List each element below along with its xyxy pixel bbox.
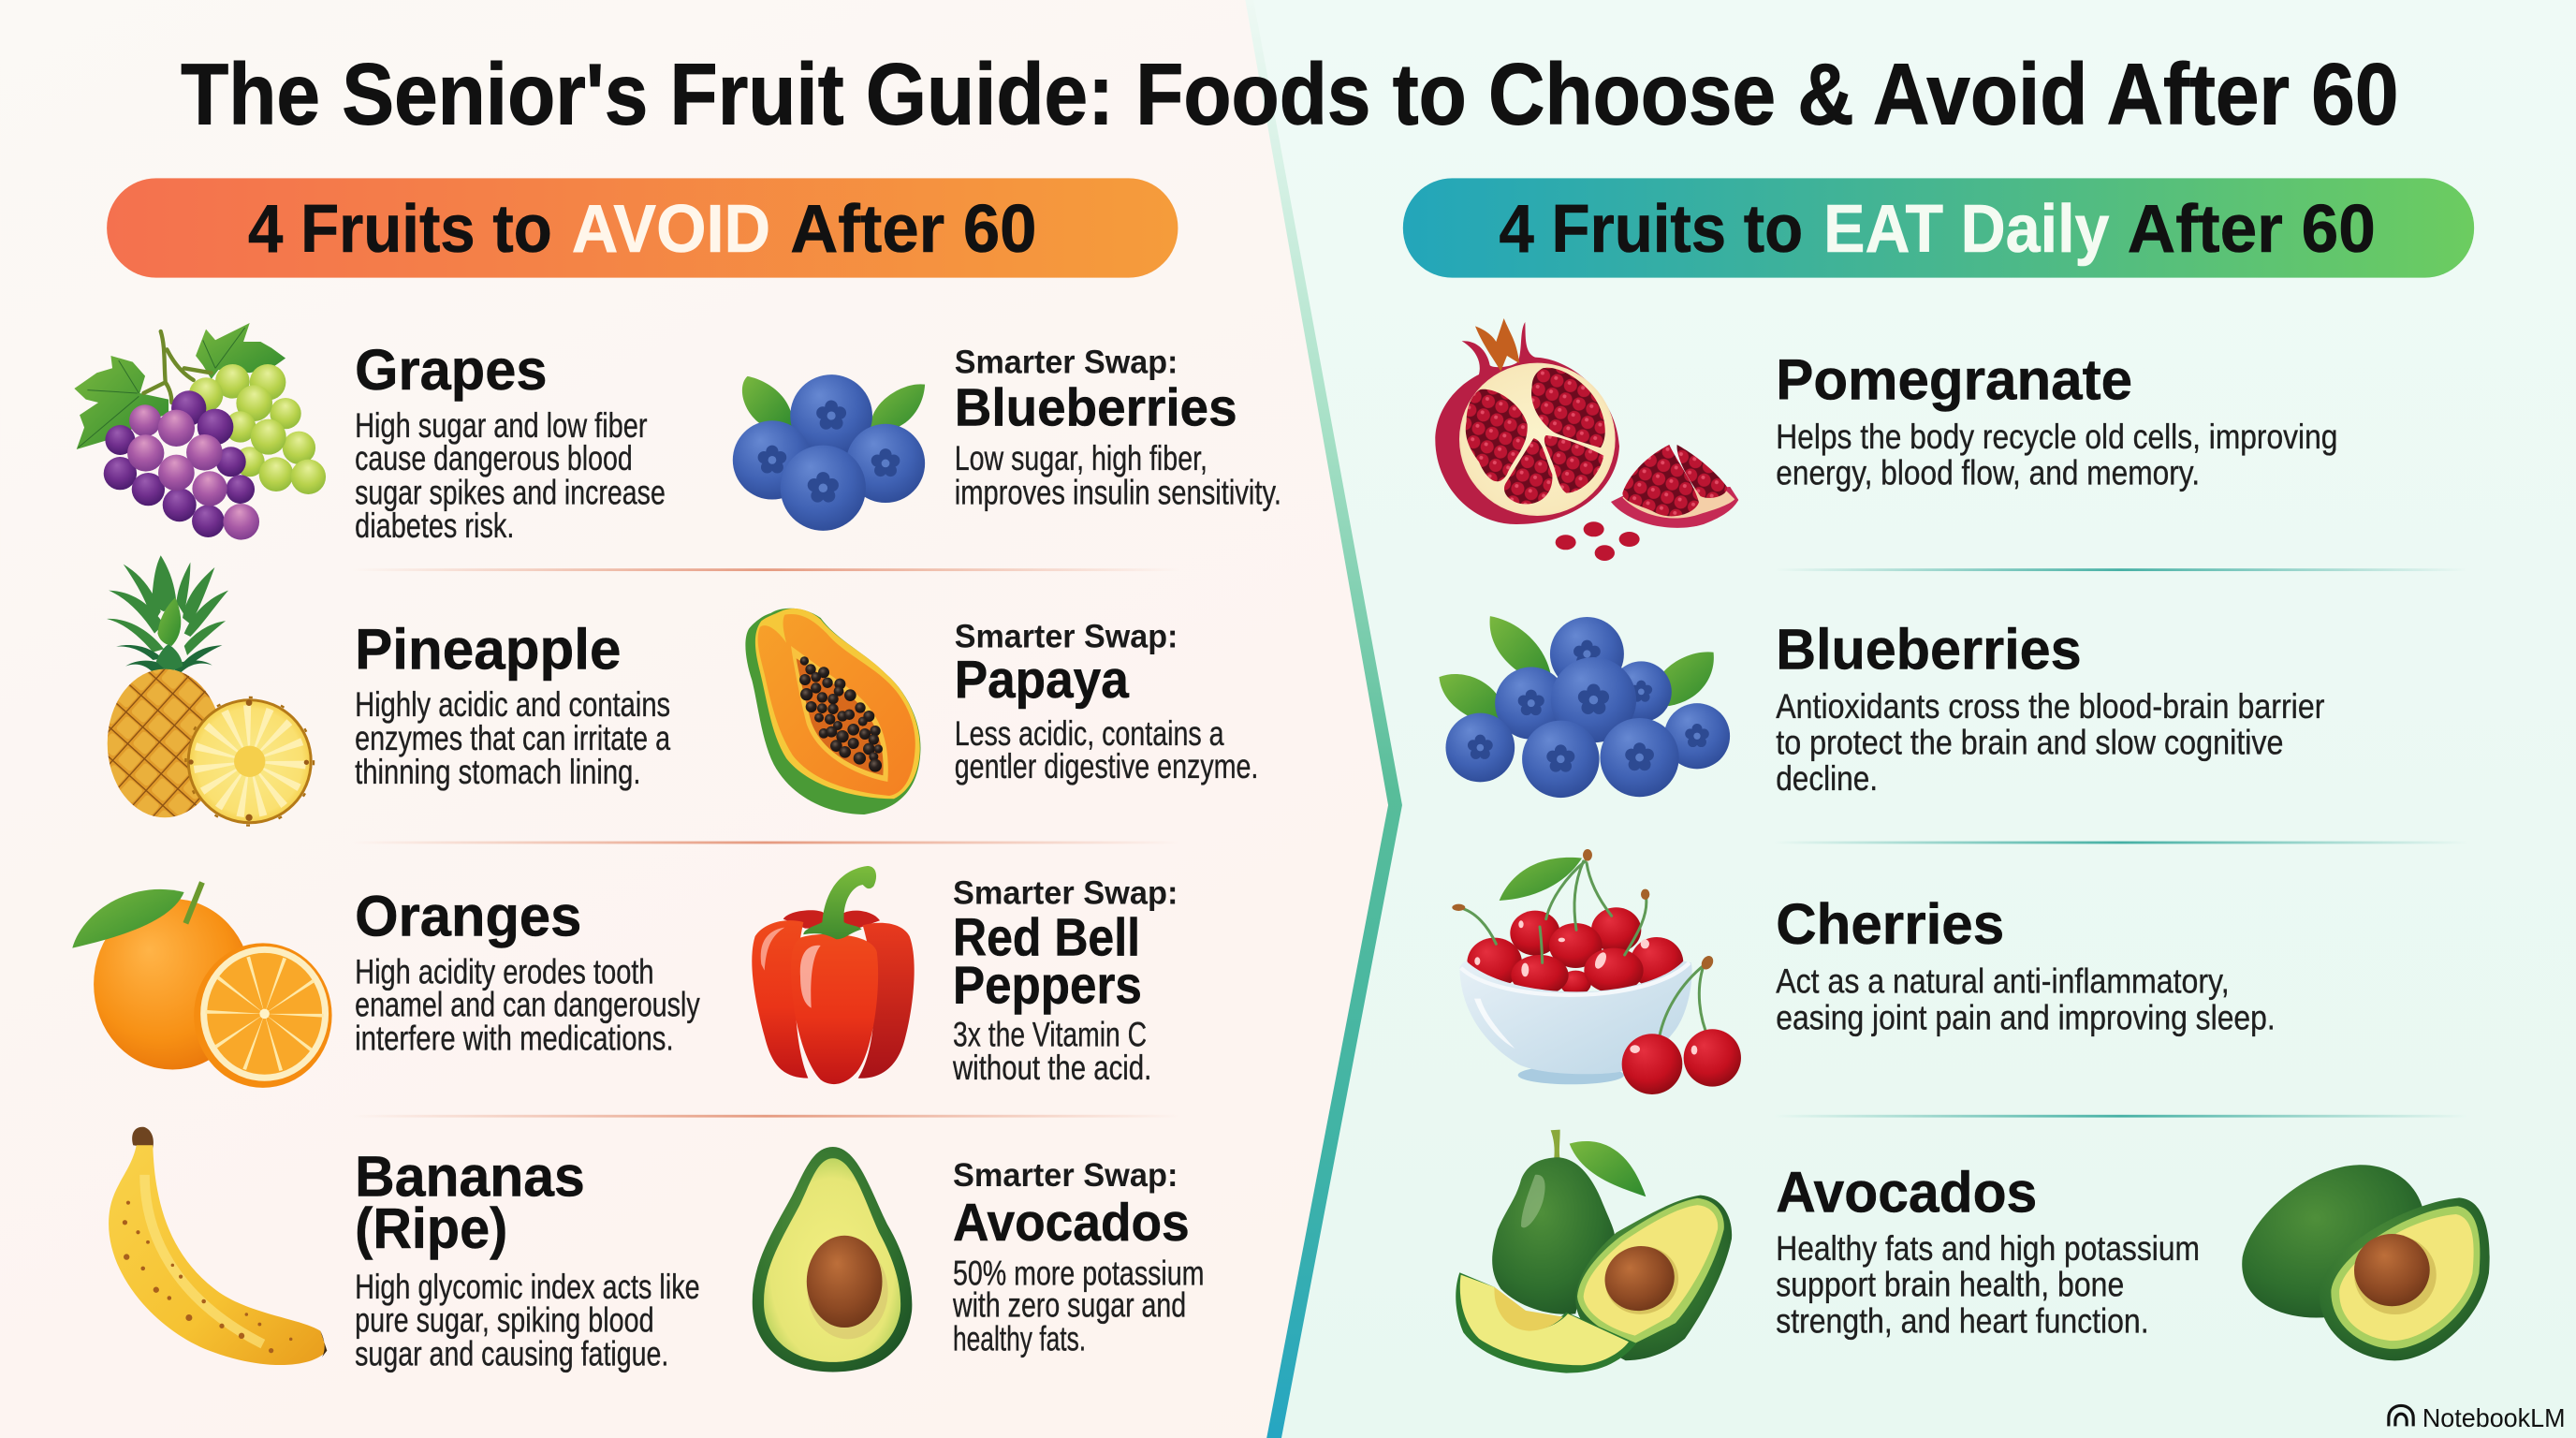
- heading pill: avoid: AVOID: [572, 192, 770, 267]
- description: pomegranate: energy, blood flow, and memory.: [1776, 454, 2200, 492]
- swap description: red bell peppers: without the acid.: [952, 1049, 1151, 1087]
- icon: grapes: [74, 323, 326, 540]
- heading pill: eat: 4 Fruits to: [1500, 192, 1803, 267]
- name: bananas: (Ripe): [355, 1196, 507, 1261]
- swap description: red bell peppers: 3x the Vitamin C: [953, 1015, 1147, 1053]
- swap label: papaya: Smarter Swap:: [955, 618, 1178, 654]
- icon: avocados group: [1456, 1130, 1732, 1373]
- icon: banana: [109, 1127, 327, 1365]
- swap description: blueberries: Low sugar, high fiber,: [955, 439, 1208, 477]
- description: pomegranate: [1776, 418, 2337, 492]
- swap description: avocados: with zero sugar and: [952, 1286, 1186, 1325]
- icon: pomegranate: [1435, 318, 1738, 561]
- swap description: red bell peppers: [952, 1015, 1151, 1087]
- heading pill: avoid: 4 Fruits to: [248, 192, 552, 267]
- description: blueberries: [1776, 687, 2324, 798]
- swap description: blueberries: improves insulin sensitivity.: [955, 473, 1281, 511]
- description: pineapple: Highly acidic and contains: [355, 685, 670, 724]
- heading pill: avoid: [107, 178, 1178, 278]
- icon: papaya: [745, 609, 920, 814]
- swap name: blueberries: Blueberries: [955, 378, 1237, 437]
- swap description: papaya: gentler digestive enzyme.: [955, 747, 1258, 785]
- description: avocados: [1776, 1229, 2200, 1340]
- name: pineapple: Pineapple: [355, 617, 621, 682]
- title: The Senior's Fruit Guide: Foods to Choose & Avoid After 60: [181, 46, 2398, 143]
- name: blueberries: Blueberries: [1776, 617, 2082, 682]
- swap description: avocados: [952, 1254, 1204, 1358]
- description: bananas: [355, 1268, 700, 1372]
- description: grapes: diabetes risk.: [355, 506, 514, 545]
- swap label: blueberries: Smarter Swap:: [955, 344, 1178, 380]
- description: pineapple: enzymes that can irritate a: [355, 719, 671, 757]
- swap name: papaya: Papaya: [955, 650, 1129, 709]
- icon: oranges: [72, 882, 332, 1088]
- description: bananas: High glycomic index acts like: [355, 1268, 700, 1306]
- icon: avocado halves: [2242, 1165, 2490, 1360]
- heading pill: avoid: After 60: [790, 192, 1036, 267]
- description: pineapple: [355, 685, 671, 791]
- description: blueberries: decline.: [1776, 759, 1878, 798]
- name: pomegranate: Pomegranate: [1776, 347, 2132, 412]
- description: cherries: [1776, 962, 2276, 1037]
- description: grapes: [355, 406, 666, 545]
- name: oranges: Oranges: [355, 884, 581, 948]
- icon: avocado swap: [753, 1147, 912, 1372]
- description: grapes: High sugar and low fiber: [355, 406, 648, 445]
- name: avocados: Avocados: [1776, 1160, 2037, 1225]
- background: right panel: [1249, 0, 2576, 1438]
- description: cherries: Act as a natural anti-inflammatory,: [1776, 962, 2230, 1001]
- icon: blueberries: [1439, 616, 1730, 798]
- icon: blueberries swap: [733, 374, 925, 531]
- description: blueberries: to protect the brain and slow cognitive: [1776, 724, 2284, 762]
- description: blueberries: Antioxidants cross the blood-brain barrier: [1776, 687, 2324, 726]
- heading pill: eat: After 60: [2128, 192, 2376, 267]
- icon: cherries in bowl: [1452, 849, 1741, 1094]
- swap description: avocados: 50% more potassium: [953, 1254, 1204, 1292]
- arrow divider between panels: [1245, 0, 1402, 1438]
- swap name: red bell peppers: Red Bell: [953, 908, 1140, 967]
- heading pill: eat: EAT Daily: [1823, 192, 2110, 267]
- swap description: avocados: healthy fats.: [953, 1320, 1086, 1358]
- swap name: red bell peppers: Peppers: [953, 955, 1142, 1014]
- swap label: avocados: Smarter Swap:: [953, 1157, 1178, 1194]
- name: grapes: Grapes: [355, 338, 547, 403]
- heading pill: eat: [1403, 178, 2474, 278]
- description: avocados: Healthy fats and high potassium: [1776, 1229, 2200, 1268]
- description: grapes: cause dangerous blood: [355, 439, 633, 477]
- description: oranges: interfere with medications.: [355, 1019, 674, 1057]
- description: pomegranate: Helps the body recycle old cells, improving: [1776, 418, 2337, 456]
- description: bananas: sugar and causing fatigue.: [355, 1334, 668, 1372]
- description: avocados: support brain health, bone: [1776, 1266, 2124, 1304]
- icon: pineapple: [107, 555, 314, 826]
- description: grapes: sugar spikes and increase: [355, 473, 666, 511]
- description: cherries: easing joint pain and improving sleep.: [1776, 999, 2276, 1037]
- swap label: red bell peppers: Smarter Swap:: [953, 874, 1178, 911]
- description: bananas: pure sugar, spiking blood: [355, 1300, 654, 1339]
- swap name: avocados: Avocados: [953, 1193, 1190, 1252]
- swap description: papaya: [955, 714, 1258, 785]
- description: oranges: High acidity erodes tooth: [355, 952, 654, 990]
- name: bananas: [355, 1145, 585, 1261]
- description: avocados: strength, and heart function.: [1776, 1301, 2149, 1340]
- swap name: red bell peppers: [953, 908, 1142, 1014]
- name: cherries: Cherries: [1776, 892, 2004, 957]
- description: oranges: [355, 952, 700, 1057]
- name: bananas: Bananas: [355, 1145, 585, 1210]
- icon: red bell pepper: [752, 866, 915, 1084]
- swap description: papaya: Less acidic, contains a: [955, 714, 1224, 753]
- panel: fruits to avoid: [72, 178, 1281, 1372]
- description: oranges: enamel and can dangerously: [355, 985, 700, 1023]
- swap description: blueberries: [955, 439, 1281, 511]
- panel: fruits to eat: [1403, 178, 2490, 1373]
- description: pineapple: thinning stomach lining.: [355, 753, 641, 791]
- logo: NotebookLM: NotebookLM: [2422, 1403, 2566, 1432]
